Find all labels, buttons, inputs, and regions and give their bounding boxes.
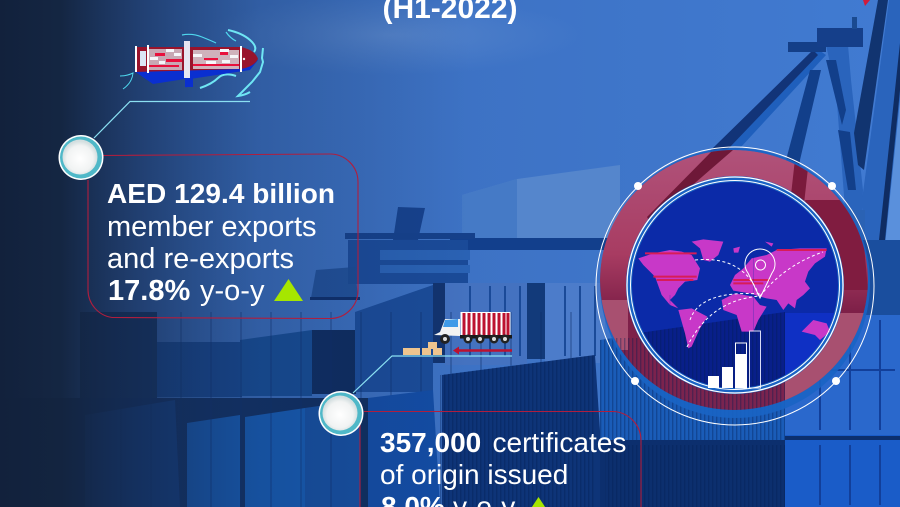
text: exports growth: y-o-y xyxy=(200,275,265,307)
text: exports value: AED 129.4 billion xyxy=(107,178,335,209)
globe graphic xyxy=(596,147,874,425)
disc photo texture xyxy=(644,312,834,388)
building xyxy=(450,165,620,250)
icon: up triangle xyxy=(524,497,553,507)
icon: delivery truck xyxy=(403,312,512,355)
text: exports description: and re-exports xyxy=(107,243,294,275)
marker: certificates xyxy=(318,391,364,436)
bar chart xyxy=(708,331,760,388)
rings and nodes xyxy=(596,147,874,425)
icon: up triangle xyxy=(274,279,303,301)
lower container stacks xyxy=(0,312,900,507)
red ring xyxy=(598,150,870,413)
harbor crane left xyxy=(310,207,475,300)
text: certificates description: of origin issued xyxy=(380,459,568,490)
world map xyxy=(638,239,830,348)
text: certificates value: certificates xyxy=(492,427,626,458)
inner disc xyxy=(632,182,838,388)
text: exports growth: 17.8% xyxy=(108,275,190,307)
text: exports description: member exports xyxy=(107,211,317,243)
upper container stacks xyxy=(80,283,605,402)
text: certificates value: 357,000 xyxy=(380,427,481,458)
panel: certificates of origin xyxy=(318,391,641,507)
dashed flight routes xyxy=(687,252,823,347)
panel: member exports xyxy=(58,135,358,318)
marker: exports xyxy=(58,135,104,180)
icon: container ship xyxy=(120,30,263,96)
quay crane right xyxy=(645,0,900,245)
connector line: truck to marker xyxy=(353,356,512,393)
icon: location pin xyxy=(745,249,775,298)
connector line: ship to marker xyxy=(94,102,250,138)
